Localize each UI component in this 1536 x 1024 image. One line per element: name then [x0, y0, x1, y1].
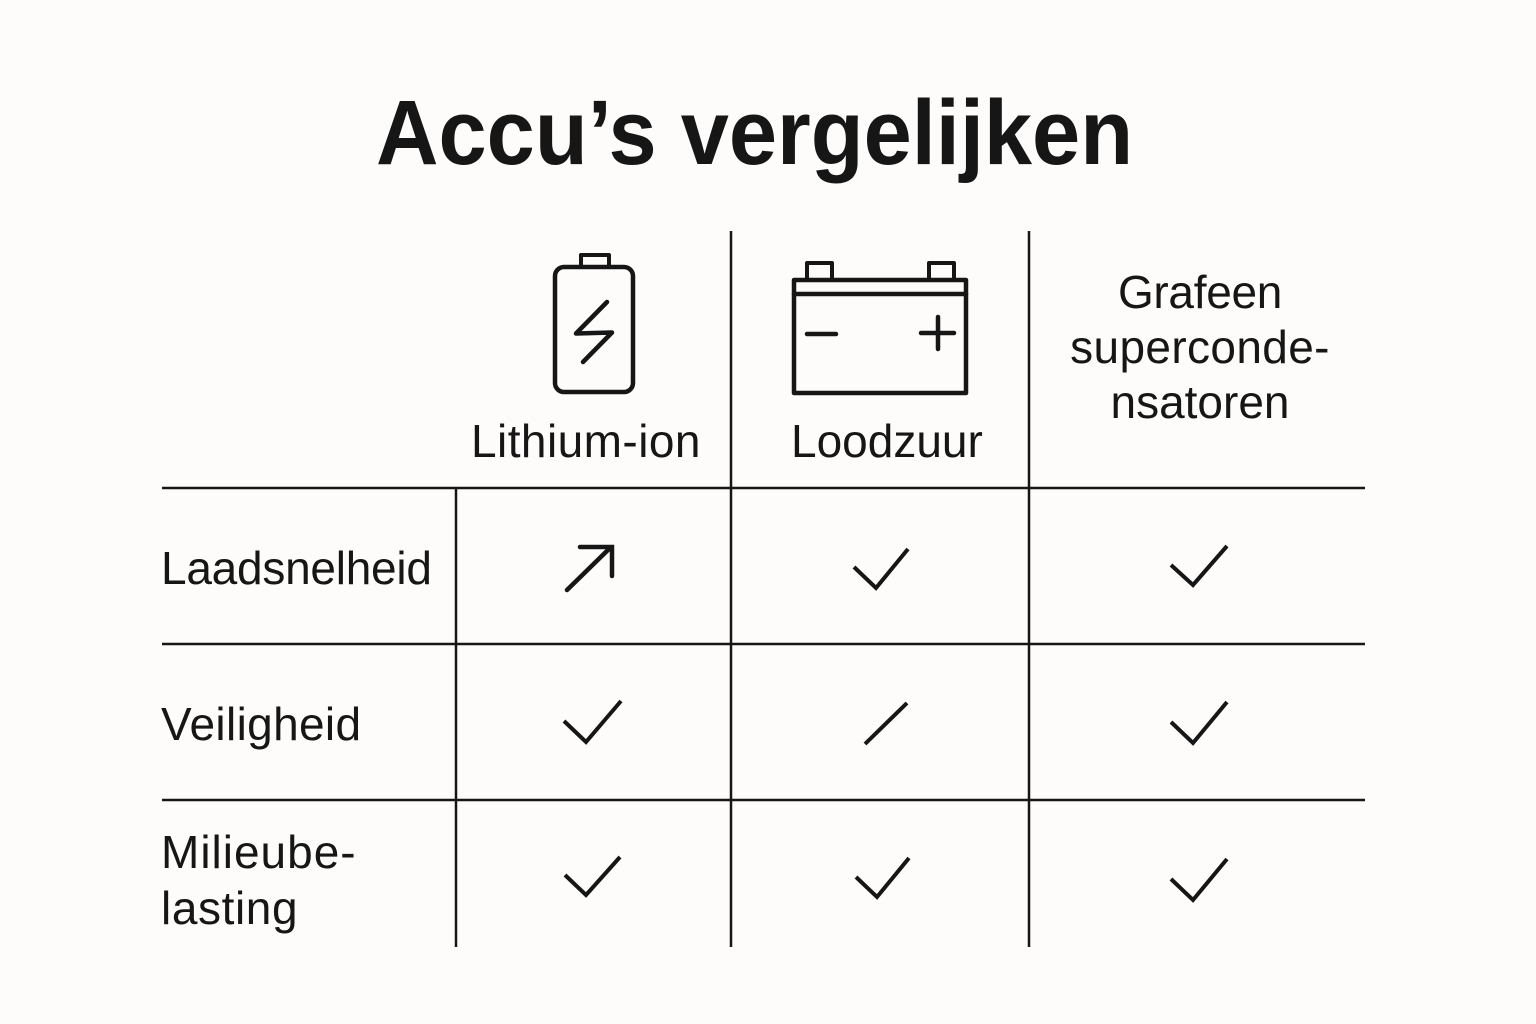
icon: lithium battery [555, 255, 633, 392]
title: Accu’s vergelijken [376, 82, 1133, 184]
icon: lead-acid battery [794, 263, 966, 393]
slash: Veiligheid Loodzuur [865, 703, 907, 744]
row label: Milieubelasting [161, 826, 357, 934]
column heading: Loodzuur: Loodzuur [791, 415, 983, 467]
column heading: Grafeen supercondensatoren: Grafeen [1118, 266, 1282, 318]
column heading: Grafeen supercondensatoren [1070, 266, 1330, 428]
column heading: Lithium-ion: Lithium-ion [471, 415, 701, 467]
row label: Milieubelasting: lasting [161, 882, 298, 934]
row label: Milieubelasting: Milieube- [161, 826, 357, 878]
table grid [162, 231, 1365, 947]
check: Laadsnelheid Grafeen [1171, 546, 1227, 585]
column heading: Grafeen supercondensatoren: superconde- [1070, 321, 1330, 373]
icon: arrow, Laadsnelheid Lithium-ion [567, 547, 612, 590]
check: Milieubelasting Lithium-ion [565, 857, 620, 895]
check: Milieubelasting Loodzuur [856, 858, 909, 897]
row label: Laadsnelheid: Laadsnelheid [161, 542, 432, 594]
check: Veiligheid Grafeen [1171, 702, 1227, 743]
check: Veiligheid Lithium-ion [564, 701, 621, 742]
row label: Veiligheid: Veiligheid [161, 698, 361, 750]
column heading: Grafeen supercondensatoren: nsatoren [1110, 376, 1290, 428]
check: Milieubelasting Grafeen [1171, 859, 1227, 900]
check: Laadsnelheid Loodzuur [854, 549, 908, 588]
